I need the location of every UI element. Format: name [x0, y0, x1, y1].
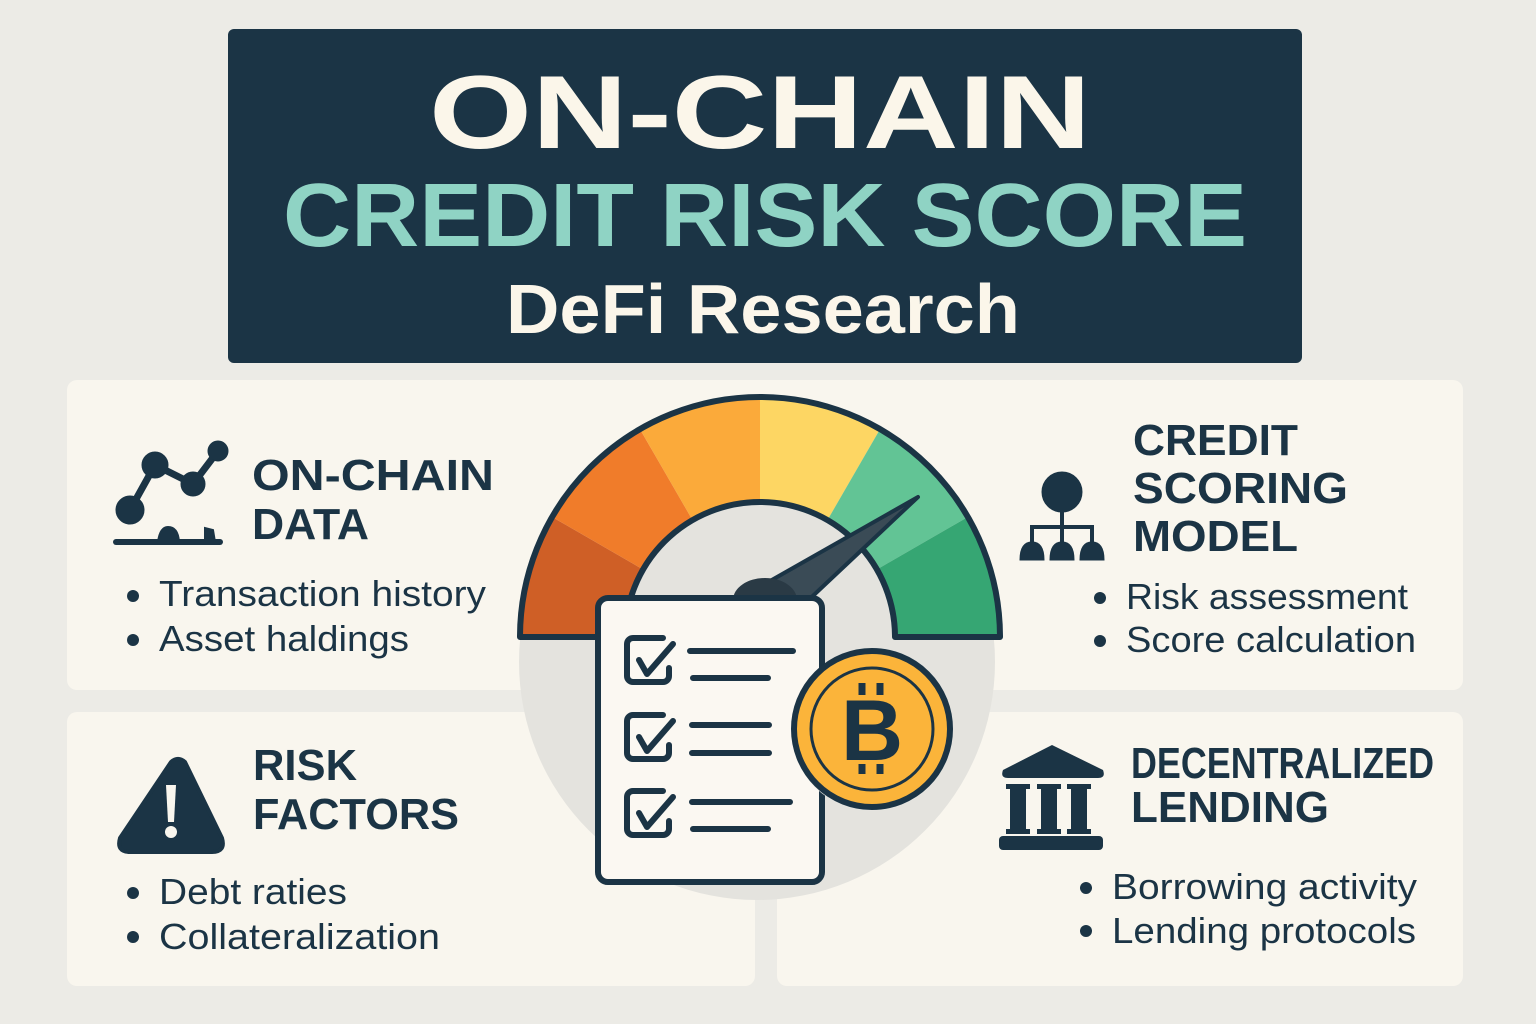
title banner: DeFi Research [506, 270, 1020, 348]
bullets: decentralized lending: Lending protocols [1112, 910, 1416, 951]
heading: on-chain data: DATA [252, 500, 369, 549]
panel: top row background [67, 380, 1463, 690]
bullets: risk factors [127, 871, 440, 957]
bullets: on-chain data [127, 573, 486, 659]
heading: decentralized lending: LENDING [1131, 783, 1329, 832]
gauge needle [733, 497, 918, 622]
heading: risk factors [253, 741, 459, 839]
bullets: decentralized lending [1080, 866, 1417, 951]
icon: on-chain data chart [116, 441, 228, 542]
bullets: on-chain data: Transaction history [159, 573, 486, 614]
icon: bank building [999, 745, 1104, 850]
title banner: ON-CHAIN [429, 55, 1091, 171]
panel: bottom right [777, 712, 1463, 986]
icon: credit scoring model tree [1020, 472, 1104, 560]
heading: credit scoring model [1133, 416, 1348, 561]
bullets: risk factors: Collateralization [159, 916, 440, 957]
heading: decentralized lending: DECENTRALIZED [1131, 739, 1434, 788]
icon: bitcoin coin: B [841, 683, 903, 779]
heading: risk factors: FACTORS [253, 790, 459, 839]
heading: credit scoring model: MODEL [1133, 512, 1298, 561]
heading: on-chain data [252, 451, 494, 549]
gauge [520, 397, 1000, 637]
bullets: credit scoring model: Risk assessment [1126, 576, 1408, 617]
bullets: on-chain data: Asset haldings [159, 618, 409, 659]
title banner [228, 29, 1302, 363]
heading: credit scoring model: SCORING [1133, 464, 1348, 513]
center gray circle backdrop [519, 424, 995, 900]
icon: checklist clipboard [598, 598, 822, 882]
heading: on-chain data: ON-CHAIN [252, 451, 494, 500]
bullets: credit scoring model [1094, 576, 1416, 660]
icon: warning triangle [119, 759, 223, 852]
heading: decentralized lending [1131, 739, 1434, 832]
heading: risk factors: RISK [253, 741, 357, 790]
bullets: risk factors: Debt raties [159, 871, 347, 912]
heading: credit scoring model: CREDIT [1133, 416, 1298, 465]
title banner: CREDIT RISK SCORE [283, 166, 1247, 266]
panel: bottom left [67, 712, 755, 986]
bullets: credit scoring model: Score calculation [1126, 619, 1416, 660]
bullets: decentralized lending: Borrowing activity [1112, 866, 1417, 907]
icon: bitcoin coin [792, 651, 952, 811]
